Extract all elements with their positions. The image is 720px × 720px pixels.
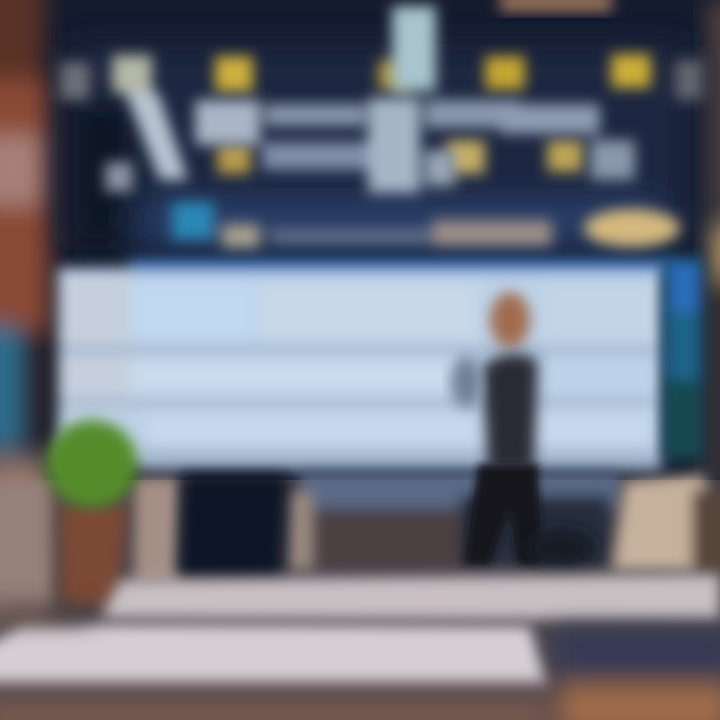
yellow squares on board [215,54,651,174]
beige armchair right [612,474,720,575]
plant leaves [46,420,138,508]
back white table [100,574,720,620]
bright blue table screen [58,260,670,470]
beige sofa left [0,478,314,610]
laptop screen [178,474,288,578]
front white table [0,624,550,690]
pale blurred lettering on board [60,6,703,193]
floor and low wall beneath the screen [300,472,620,568]
dark bag at presenter feet [528,528,596,568]
potted plant [46,420,138,605]
right wall edge [704,0,720,485]
presenter legs [464,465,542,565]
presenter figure [451,292,542,565]
left wooden wall [0,0,50,625]
plant pot [60,505,128,605]
presenter raised arm [451,356,481,408]
top dark board [70,45,690,250]
blue teal side panel [664,258,702,460]
presenter hair [490,292,530,348]
floor foreground [0,606,720,720]
presenter torso [482,354,538,470]
lower board labels [172,202,680,248]
top ceiling light [500,0,612,12]
